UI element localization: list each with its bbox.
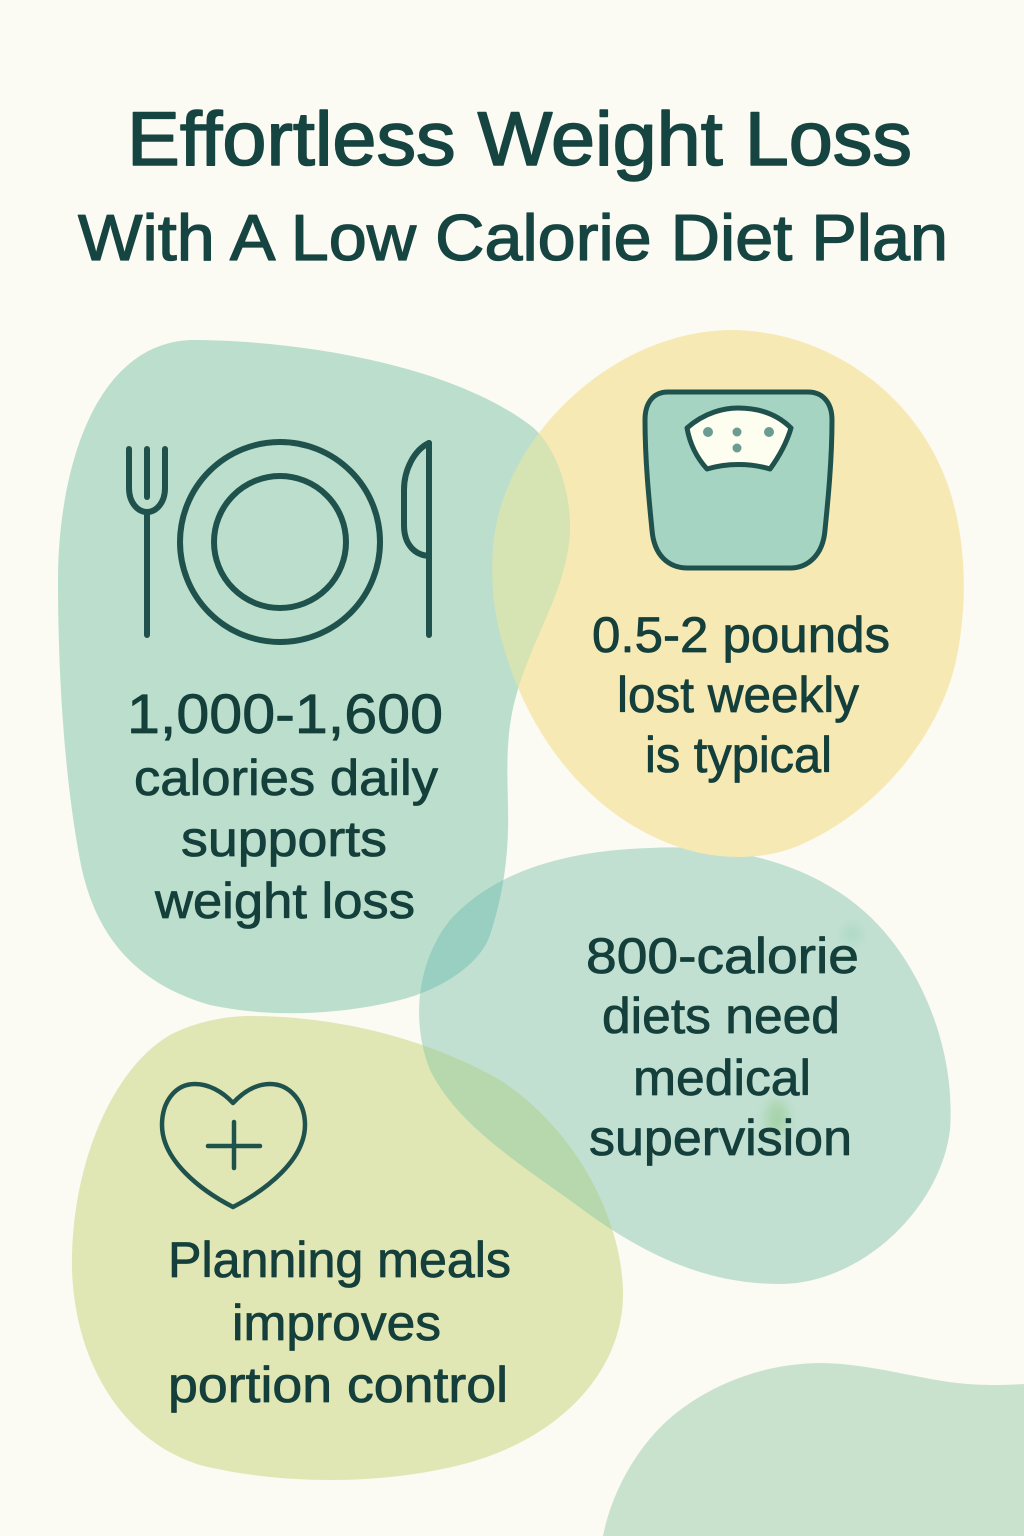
text: calories <box>127 682 443 929</box>
text: medical supervision: diets need <box>602 988 840 1044</box>
text: planning meals: Planning meals <box>168 1232 511 1288</box>
smudges on teal blob <box>766 925 861 1136</box>
overlap: green and teal <box>420 880 504 994</box>
text: planning meals: portion control <box>168 1357 508 1413</box>
text: pounds lost <box>592 607 890 783</box>
icon: plate and cutlery <box>129 442 429 642</box>
text: calories: supports <box>181 811 387 867</box>
icon: bathroom scale <box>645 392 832 568</box>
text: pounds lost: is typical <box>645 727 832 783</box>
text: medical supervision: supervision <box>589 1110 852 1166</box>
overlap: lime and teal <box>422 1045 612 1230</box>
text: medical supervision: 800-calorie <box>586 928 859 984</box>
text: medical supervision: medical <box>633 1050 811 1106</box>
text: calories: calories daily <box>134 750 438 806</box>
decorative corner blob <box>603 1363 1024 1536</box>
title: Effortless Weight Loss <box>127 97 912 182</box>
text: pounds lost: lost weekly <box>617 667 859 723</box>
panel: weekly loss blob <box>492 330 964 857</box>
text: calories: 1,000-1,600 <box>127 682 443 745</box>
overlap: green and yellow <box>492 434 570 688</box>
panel: medical supervision blob <box>419 847 951 1284</box>
text: pounds lost: 0.5-2 pounds <box>592 607 890 663</box>
title <box>78 97 948 274</box>
icon: heart with plus <box>162 1084 305 1207</box>
panel: planning meals blob <box>72 1016 623 1480</box>
text: medical supervision <box>586 928 859 1166</box>
panel: calories blob <box>58 340 570 1013</box>
text: planning meals: improves <box>232 1295 441 1351</box>
text: planning meals <box>168 1232 511 1413</box>
text: calories: weight loss <box>154 873 415 929</box>
title: With A Low Calorie Diet Plan <box>78 201 948 274</box>
